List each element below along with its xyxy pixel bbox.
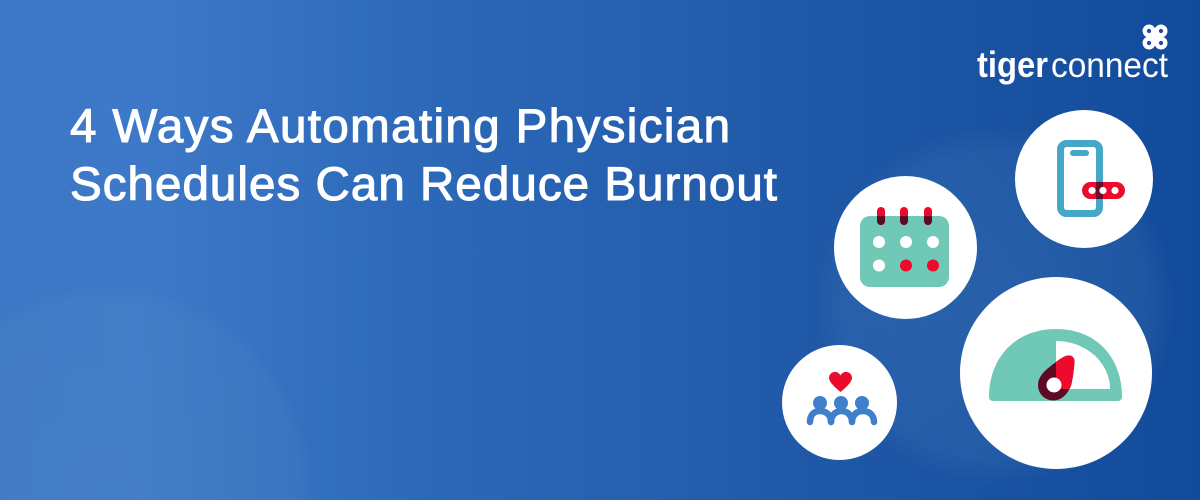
icon: three people xyxy=(810,396,874,422)
icon circle: phone xyxy=(1015,110,1153,248)
icon circle: calendar xyxy=(834,176,977,319)
icon circle: people xyxy=(782,345,897,460)
icon: message bubble xyxy=(1082,182,1125,199)
icon circle: gauge xyxy=(960,277,1152,469)
title: Schedules Can Reduce Burnout xyxy=(70,158,777,211)
logo: tigerconnect xyxy=(977,27,1168,85)
logo wordmark: connect: connect xyxy=(1051,46,1168,85)
icon: heart xyxy=(829,372,852,392)
icon: calendar xyxy=(860,207,949,287)
title: 4 Ways Automating Physician xyxy=(70,100,730,153)
logo wordmark: tiger: tiger xyxy=(977,44,1048,85)
title xyxy=(70,100,777,211)
icon: phone xyxy=(1060,144,1100,214)
icon: gauge xyxy=(989,329,1122,401)
logo icon xyxy=(1145,27,1165,47)
